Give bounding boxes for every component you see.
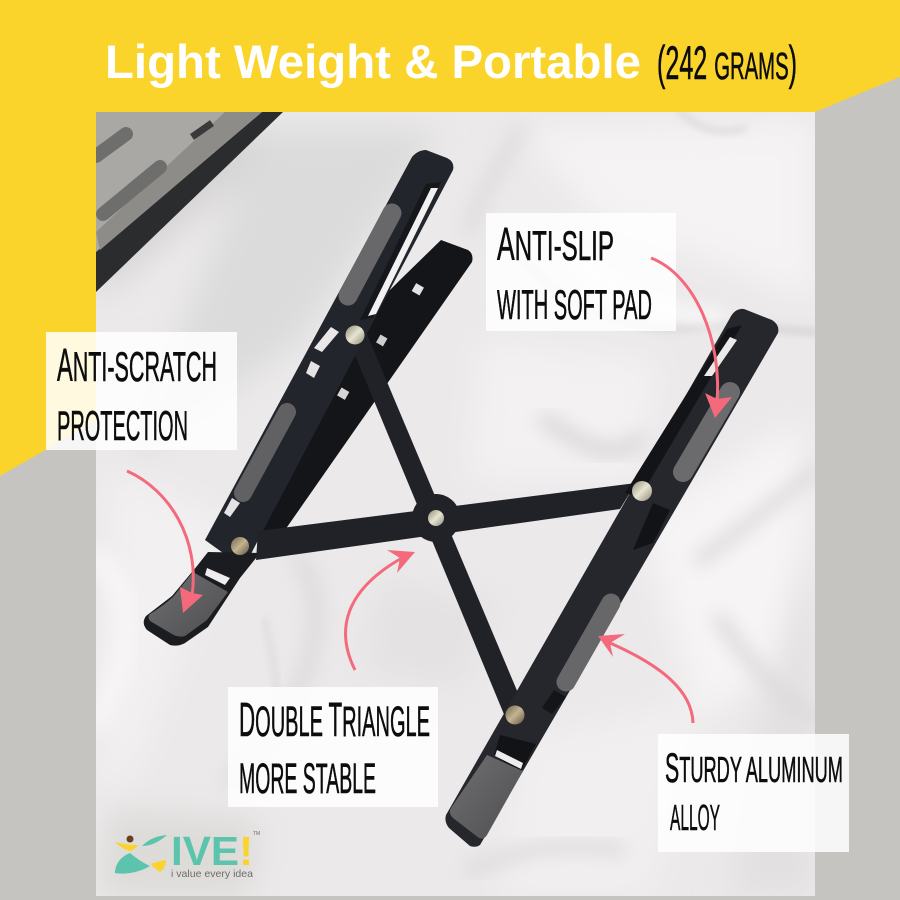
stand: scissor bar from left pin to right pin [256,483,636,560]
arrow: sturdy aluminum [598,634,693,723]
stand: centre hinge [412,494,460,542]
soft pad: left lower [243,412,287,493]
callout: double triangle: MORE STABLE [239,755,376,803]
callout: anti-scratch: PROTECTION [57,402,188,449]
arrow: anti-scratch [127,471,203,613]
logo [115,828,260,880]
logo tagline: i value every idea [171,868,253,880]
stand: scissor bar from top pin to bottom pin [356,334,517,714]
callout: anti-slip [486,213,676,331]
callout: anti-scratch [46,332,237,450]
stand: rivets [231,326,652,724]
title: Light Weight & Portable [105,35,641,88]
soft pad: left upper [348,213,392,296]
callout: double triangle: DOUBLE TRIANGLE [239,694,430,747]
stand: front left arm [205,150,453,568]
arrow: anti-slip [651,258,732,418]
logo wordmark: IVE! [171,828,253,874]
callout: anti-scratch: ANTI-SCRATCH [57,339,217,391]
soft pad: right lower [566,603,611,682]
callout: anti-slip: WITH SOFT PAD [497,281,652,328]
stand: left foot [144,552,260,646]
stand: back left arm [263,240,472,530]
photo: white fabric [96,112,815,896]
yellow banner [0,0,900,476]
soft pad: right upper [683,392,730,472]
background stand in photo [96,112,283,292]
stand: right arm [445,309,778,847]
callout: anti-slip: ANTI-SLIP [497,218,614,270]
callout: sturdy aluminum: ALLOY [670,797,720,838]
logo trademark: TM [253,831,260,837]
logo mark [115,835,167,874]
arrow: double triangle [346,550,415,670]
callout: double triangle [228,687,438,807]
callout: sturdy aluminum [658,734,849,852]
weight note: (242 GRAMS) [657,36,797,89]
